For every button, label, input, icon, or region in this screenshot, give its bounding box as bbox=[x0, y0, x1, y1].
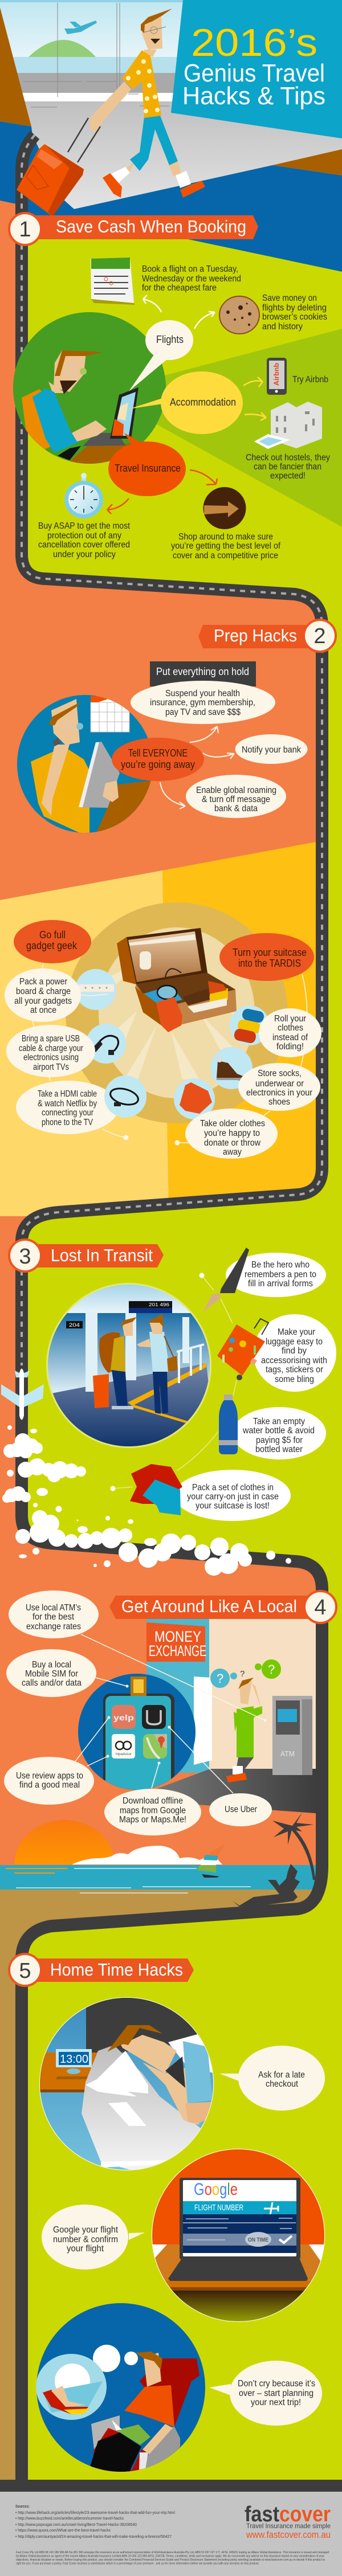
bubble: power board: at once bbox=[30, 1005, 56, 1015]
icon: boot bbox=[210, 1047, 253, 1089]
fastcover logo: www.fastcover.com.au bbox=[246, 2529, 331, 2540]
speech bubble: late checkout: checkout bbox=[266, 2079, 299, 2089]
cookie icon bbox=[219, 296, 259, 334]
bubble: suspend: pay TV and save $$$ bbox=[165, 708, 241, 717]
calendar icon bbox=[91, 257, 135, 305]
icon: rolled clothes bbox=[230, 1005, 270, 1045]
white arrows: tell bbox=[160, 726, 234, 809]
man silhouette in deckchair bbox=[233, 1864, 300, 1907]
sources list bbox=[15, 2505, 175, 2539]
speech bubble: next trip: over – start planning bbox=[239, 2389, 314, 2398]
flights bubble bbox=[129, 320, 193, 391]
icon: power board bbox=[75, 969, 116, 1010]
suitcase bbox=[17, 118, 100, 224]
text: delete cookies: flights by deleting bbox=[262, 303, 327, 313]
bubble: suspend: insurance, gym membership, bbox=[150, 698, 255, 708]
title: 2016's: 2016’s bbox=[191, 21, 317, 64]
icon: water bottle bbox=[219, 1395, 238, 1454]
title panel bbox=[171, 0, 342, 138]
text: buy asap bbox=[38, 521, 131, 559]
speech bubble: late checkout bbox=[219, 2046, 325, 2111]
fastcover logo: Travel Insurance made simple bbox=[246, 2522, 331, 2530]
text: delete cookies: and history bbox=[262, 322, 303, 332]
bubble: pen: remembers a pen to bbox=[245, 1270, 316, 1279]
bubble: ATMs bbox=[9, 1590, 99, 1638]
bubble: HDMI cable: phone to the TV bbox=[42, 1118, 93, 1127]
fastcover logo bbox=[245, 2503, 331, 2540]
ATM machine: ATM bbox=[280, 1749, 295, 1758]
sleeping man circle bbox=[39, 1997, 214, 2170]
airport circle: 201 496 bbox=[149, 1302, 170, 1307]
yelp app: yelp bbox=[113, 1713, 134, 1722]
icon: stickered suitcase: Make your bbox=[278, 1327, 315, 1337]
section 4 banner bbox=[109, 1591, 336, 1623]
speech bubble: next trip: your next trip! bbox=[251, 2398, 301, 2407]
bubble: SIM bbox=[6, 1649, 96, 1697]
icon: stickered suitcase: accessorising with bbox=[261, 1356, 327, 1365]
bubble: pen: Be the hero who bbox=[251, 1260, 310, 1270]
bubble: offline maps: maps from Google bbox=[120, 1806, 186, 1816]
accommodation bubble: Accommodation bbox=[170, 396, 236, 408]
bubble: older clothes: away bbox=[223, 1147, 242, 1157]
beach scene bbox=[6, 1813, 315, 1907]
heading: Save Cash When Booking: Save Cash When Booking bbox=[56, 216, 246, 236]
sun bbox=[14, 1820, 115, 1864]
bubble: store socks: shoes bbox=[268, 1097, 290, 1107]
bubble: HDMI cable bbox=[16, 1081, 119, 1134]
bubble: power board bbox=[5, 968, 81, 1022]
bubble: power board: all your gadgets bbox=[14, 996, 72, 1006]
bubble: spare clothes: your suitcase is lost! bbox=[196, 1501, 270, 1511]
tripadvisor app bbox=[112, 1734, 135, 1759]
section 5 banner bbox=[9, 1954, 194, 1986]
confused tourist: ? bbox=[240, 1669, 245, 1679]
traveller with backpack bbox=[93, 1317, 137, 1409]
confused tourist bbox=[226, 1669, 262, 1782]
travel insurance bubble bbox=[108, 433, 186, 496]
stopwatch icon bbox=[64, 473, 103, 518]
sources list: Sources: bbox=[15, 2505, 30, 2509]
bubble: review apps bbox=[4, 1757, 94, 1805]
text: hostels: can be fancier than bbox=[254, 462, 321, 472]
bubble: notify bank: Notify your bank bbox=[242, 745, 301, 755]
airplane bbox=[1, 1368, 44, 1420]
bubble: water bottle: bottled water bbox=[255, 1445, 303, 1454]
text: shop around: you’re getting the best level of bbox=[171, 541, 281, 551]
speech bubble: google flight: Google your flight bbox=[53, 2225, 119, 2235]
icon: stickered suitcase: some bling bbox=[275, 1375, 314, 1384]
heading: Home Time Hacks: Home Time Hacks bbox=[50, 1960, 183, 1980]
icon: stickered suitcase: find by bbox=[282, 1346, 307, 1356]
bubble: water bottle: paying $5 for bbox=[256, 1436, 303, 1445]
hero airport scene bbox=[0, 0, 342, 211]
text: delete cookies bbox=[262, 293, 327, 332]
icon: red shirt bbox=[174, 1078, 215, 1119]
speech bubble: late checkout: Ask for a late bbox=[258, 2070, 305, 2080]
bubble: review apps: Use review apps to bbox=[16, 1771, 83, 1781]
number 5 badge: 5 bbox=[19, 1959, 31, 1983]
road bbox=[22, 135, 322, 2480]
arrow icon: shop around bbox=[203, 487, 246, 529]
phone call man circle bbox=[17, 695, 150, 833]
connector lines: local bbox=[75, 1634, 265, 1793]
alarm clock: 13:00 bbox=[60, 2053, 88, 2066]
bubble: older clothes: Take older clothes bbox=[200, 1119, 265, 1128]
bubble: HDMI cable: connecting your bbox=[42, 1108, 93, 1118]
number 2 badge bbox=[304, 620, 336, 652]
airport circle bbox=[46, 1283, 211, 1448]
man at laptop circle bbox=[13, 312, 166, 473]
fastcover logo: cover bbox=[279, 2503, 331, 2526]
airbnb phone bbox=[267, 358, 287, 395]
text: book a flight: Book a flight on a Tuesday, bbox=[142, 264, 238, 274]
walking man bbox=[89, 9, 205, 198]
alarm clock bbox=[56, 2049, 92, 2067]
number 3 badge bbox=[9, 1240, 41, 1271]
bubble: power board: Pack a power bbox=[19, 977, 67, 987]
text: money exchange sign: MONEY bbox=[154, 1628, 201, 1645]
bubble: ATMs: Use local ATM’s bbox=[26, 1603, 81, 1613]
bubble: HDMI cable: Take a HDMI cable bbox=[38, 1089, 97, 1099]
legal disclaimer bbox=[16, 2551, 329, 2566]
number 1 badge: 1 bbox=[19, 218, 31, 242]
flights bubble: Flights bbox=[156, 334, 184, 345]
bubble: store socks bbox=[238, 1063, 320, 1111]
bubble: go full gadget geek: gadget geek bbox=[26, 940, 78, 951]
plane seat circle bbox=[36, 2303, 205, 2475]
sources list: • http://www.lifehack.org/articles/lifestyle/23-awesome-travel-hacks-that-add-fun-your-trip.html bbox=[15, 2511, 175, 2515]
section 2 banner bbox=[198, 620, 336, 652]
text: Google logo: Google bbox=[194, 2180, 238, 2199]
dark heading: put everything on hold bbox=[150, 661, 256, 686]
bubble: enable roaming: bank & data bbox=[214, 804, 258, 813]
icon: stickered suitcase: tags, stickers or bbox=[266, 1365, 323, 1375]
text: hostels bbox=[246, 453, 330, 481]
traveller pointing bbox=[137, 1314, 178, 1414]
sources list: • http://www.popsugar.com.au/smart-living/Best-Travel-Hacks-39208540 bbox=[15, 2523, 137, 2527]
bubble: Uber bbox=[209, 1793, 272, 1826]
text: shop around: Shop around to make sure bbox=[178, 532, 273, 542]
bubble: go full gadget geek bbox=[14, 920, 91, 963]
text: hostels: Check out hostels, they bbox=[246, 453, 330, 463]
money exchange shop bbox=[146, 1619, 316, 1813]
bubble: USB cable bbox=[6, 1025, 95, 1077]
text: hostels: expected! bbox=[270, 471, 306, 481]
bubble: SIM: Buy a local bbox=[32, 1660, 71, 1670]
bubble: notify bank bbox=[235, 734, 308, 764]
bubble: water bottle: water bottle & avoid bbox=[242, 1426, 315, 1436]
text: book a flight bbox=[142, 264, 241, 293]
bubble: HDMI cable: & watch Netflix by bbox=[38, 1099, 97, 1109]
yelp app bbox=[112, 1705, 136, 1729]
fastcover logo: fast bbox=[245, 2503, 279, 2526]
bubble: spare clothes: your carry-on just in case bbox=[187, 1492, 279, 1502]
bubble: ATMs: for the best bbox=[32, 1612, 75, 1622]
background: sea and sand bbox=[0, 1865, 322, 2480]
bubble: suspend bbox=[131, 681, 275, 724]
text: shop around bbox=[171, 532, 281, 561]
sources list: • https://www.quora.com/What-are-the-best-travel-hacks bbox=[15, 2529, 111, 2533]
question bubbles bbox=[210, 1659, 281, 1688]
text: book a flight: for the cheapest fare bbox=[142, 283, 217, 293]
bubble: USB cable: Bring a spare USB bbox=[22, 1034, 80, 1044]
icon: stickered suitcase: luggage easy to bbox=[266, 1337, 323, 1347]
rays from suitcase bbox=[105, 963, 245, 1082]
bubble: power board: board & charge bbox=[16, 987, 71, 996]
icon: pen bbox=[199, 1248, 249, 1312]
bubble: pen bbox=[226, 1253, 326, 1297]
speech bubble: google flight: number & confirm bbox=[53, 2235, 118, 2244]
phone apps circle bbox=[78, 1674, 196, 1790]
speech bubble: next trip: Don’t cry because it’s bbox=[238, 2379, 315, 2389]
text: delete cookies: Save money on bbox=[262, 293, 317, 303]
travel insurance bubble: Travel Insurance bbox=[115, 463, 181, 474]
bubble: tell everyone bbox=[112, 738, 204, 781]
text: shop around: cover and a competitive price bbox=[173, 551, 278, 561]
tripadvisor app: tripadvisor bbox=[116, 1753, 132, 1756]
bubble: tell everyone: Tell EVERYONE bbox=[128, 747, 188, 759]
orange arrows bbox=[107, 470, 217, 514]
text: book a flight: Wednesday or the weekend bbox=[142, 274, 241, 284]
text: money exchange sign bbox=[149, 1628, 206, 1659]
icon: stickered suitcase bbox=[217, 1314, 336, 1392]
icon: folded clothes bbox=[111, 1464, 182, 1515]
bubble: store socks: Store socks, bbox=[258, 1069, 302, 1078]
bubble: USB cable: airport TVs bbox=[33, 1062, 69, 1072]
bubble: water bottle bbox=[233, 1407, 326, 1459]
sources list: • http://www.buzzfeed.com/ariellecalderon/summer-travel-hacks bbox=[15, 2517, 124, 2521]
maps app bbox=[143, 1734, 167, 1759]
dark heading: put everything on hold: Put everything on hold bbox=[156, 666, 249, 677]
icon: HDMI cable bbox=[104, 1076, 146, 1118]
footer panel bbox=[0, 2492, 342, 2576]
bubble: roll clothes bbox=[259, 1008, 321, 1057]
white arrows bbox=[143, 295, 215, 329]
question bubbles: ? bbox=[268, 1662, 275, 1677]
bubble: SIM: Mobile SIM for bbox=[25, 1669, 78, 1679]
bubble: spare clothes: Pack a set of clothes in bbox=[192, 1483, 274, 1493]
connector dots: local bbox=[106, 1685, 267, 1765]
speech bubble: google flight: your flight bbox=[67, 2244, 104, 2254]
accommodation bubble bbox=[129, 371, 243, 434]
number 4 badge: 4 bbox=[314, 1596, 327, 1620]
bubble: roll clothes: folding! bbox=[276, 1042, 304, 1052]
bubble: ATMs: exchange rates bbox=[26, 1622, 81, 1632]
bubble: offline maps: Download offline bbox=[123, 1796, 183, 1806]
bubble: enable roaming bbox=[186, 775, 286, 818]
bubble: offline maps bbox=[104, 1789, 201, 1835]
title: Genius Travel: Genius Travel bbox=[184, 59, 325, 87]
bubble: older clothes: you’re happy to bbox=[204, 1128, 260, 1138]
bubble: TARDIS bbox=[219, 933, 314, 981]
bubble: spare clothes bbox=[174, 1470, 291, 1521]
number 5 badge bbox=[9, 1954, 41, 1986]
background: deep blue band bbox=[0, 121, 342, 272]
icon: USB cable bbox=[86, 1024, 126, 1064]
number 2 badge: 2 bbox=[314, 624, 326, 648]
bubble: SIM: calls and/or data bbox=[22, 1678, 82, 1688]
uber app bbox=[142, 1705, 166, 1729]
bubble: store socks: underwear or bbox=[255, 1079, 304, 1089]
text: flight number: FLIGHT NUMBER bbox=[194, 2203, 243, 2213]
heading: Prep Hacks: Prep Hacks bbox=[214, 625, 297, 645]
heading: Get Around Like A Local: Get Around Like A Local bbox=[121, 1596, 297, 1616]
bubble: go full gadget geek: Go full bbox=[39, 929, 66, 941]
hostel building bbox=[254, 402, 322, 449]
text: buy asap: cancellation cover offered bbox=[38, 540, 130, 550]
background: yellow packing panels bbox=[0, 842, 322, 1216]
bubble: water bottle: Take an empty bbox=[253, 1417, 305, 1426]
bubble: review apps: find a good meal bbox=[19, 1780, 80, 1790]
title: Hacks & Tips: Hacks & Tips bbox=[182, 82, 325, 110]
airport circle: 204 bbox=[69, 1322, 80, 1328]
bubble: offline maps: Maps or Maps.Me! bbox=[119, 1815, 186, 1825]
sources list: • http://diply.com/auntyacid/24-amazing-travel-hacks-that-will-make-traveling-a-breeze/56427 bbox=[15, 2535, 172, 2539]
sailboat bbox=[197, 1845, 225, 1878]
section 1 banner bbox=[9, 213, 258, 245]
legal disclaimer: right for you. If you purchase a policy, Fast Cover receives a commission which is a percentage of your premium - ask us for more information before we provide you with any services on this product. bbox=[16, 2562, 259, 2566]
number 1 badge bbox=[9, 213, 41, 245]
laptop circle bbox=[148, 2148, 331, 2325]
bubble: pen: fill in arrival forms bbox=[248, 1279, 313, 1289]
clouds bbox=[2, 1425, 291, 1576]
number 3 badge: 3 bbox=[19, 1245, 31, 1269]
ATM machine bbox=[272, 1696, 312, 1775]
connector lines: transit bbox=[113, 1275, 237, 1489]
bubble: roll clothes: instead of bbox=[272, 1033, 308, 1042]
number 4 badge bbox=[304, 1591, 336, 1623]
text: try airbnb: Try Airbnb bbox=[292, 375, 328, 385]
text: buy asap: under your policy bbox=[53, 550, 116, 559]
text: money exchange sign: EXCHANGE bbox=[149, 1642, 206, 1659]
speech bubble: google flight bbox=[42, 2205, 145, 2270]
airbnb phone: Airbnb bbox=[272, 363, 280, 386]
palm tree bbox=[272, 1813, 315, 1880]
text: buy asap: Buy ASAP to get the most bbox=[38, 521, 131, 531]
yellow arrows bbox=[243, 377, 266, 420]
speech bubble: next trip bbox=[209, 2361, 322, 2426]
background: orange and beach ground bbox=[0, 201, 322, 1866]
bubble: TARDIS: into the TARDIS bbox=[238, 958, 301, 969]
bubble: USB cable: electronics using bbox=[23, 1053, 79, 1062]
laptop circle: ON TIME bbox=[248, 2237, 268, 2243]
bubble: Uber: Use Uber bbox=[225, 1805, 257, 1814]
bubble: store socks: electronics in your bbox=[246, 1088, 312, 1098]
open suitcase bbox=[117, 928, 237, 1032]
bubble: older clothes bbox=[185, 1109, 278, 1159]
question bubbles: ? bbox=[217, 1671, 223, 1686]
heading: Lost In Transit: Lost In Transit bbox=[51, 1245, 153, 1265]
bubble: roll clothes: clothes bbox=[278, 1023, 303, 1033]
bubble: enable roaming: & turn off message bbox=[202, 795, 270, 804]
section 3 banner bbox=[9, 1240, 164, 1271]
bubble: tell everyone: you’re going away bbox=[121, 759, 195, 770]
text: buy asap: protection out of any bbox=[47, 531, 121, 541]
text: delete cookies: browser’s cookies bbox=[262, 312, 327, 322]
thought bubble: beach dream bbox=[36, 2345, 138, 2420]
SIM card bbox=[131, 1677, 146, 1696]
bubble: TARDIS: Turn your suitcase bbox=[233, 947, 307, 958]
connector lines: packing bbox=[32, 964, 307, 1143]
footer road bar bbox=[0, 2480, 342, 2492]
bubble: suspend: Suspend your health bbox=[165, 689, 240, 698]
bubble: older clothes: donate or throw bbox=[204, 1138, 261, 1148]
background: darker green wedge bbox=[157, 329, 342, 527]
connector dots bbox=[123, 1135, 180, 1145]
bubble: USB cable: cable & charge your bbox=[19, 1044, 83, 1053]
bubble: enable roaming: Enable global roaming bbox=[196, 786, 276, 795]
bubble: roll clothes: Roll your bbox=[274, 1014, 306, 1024]
